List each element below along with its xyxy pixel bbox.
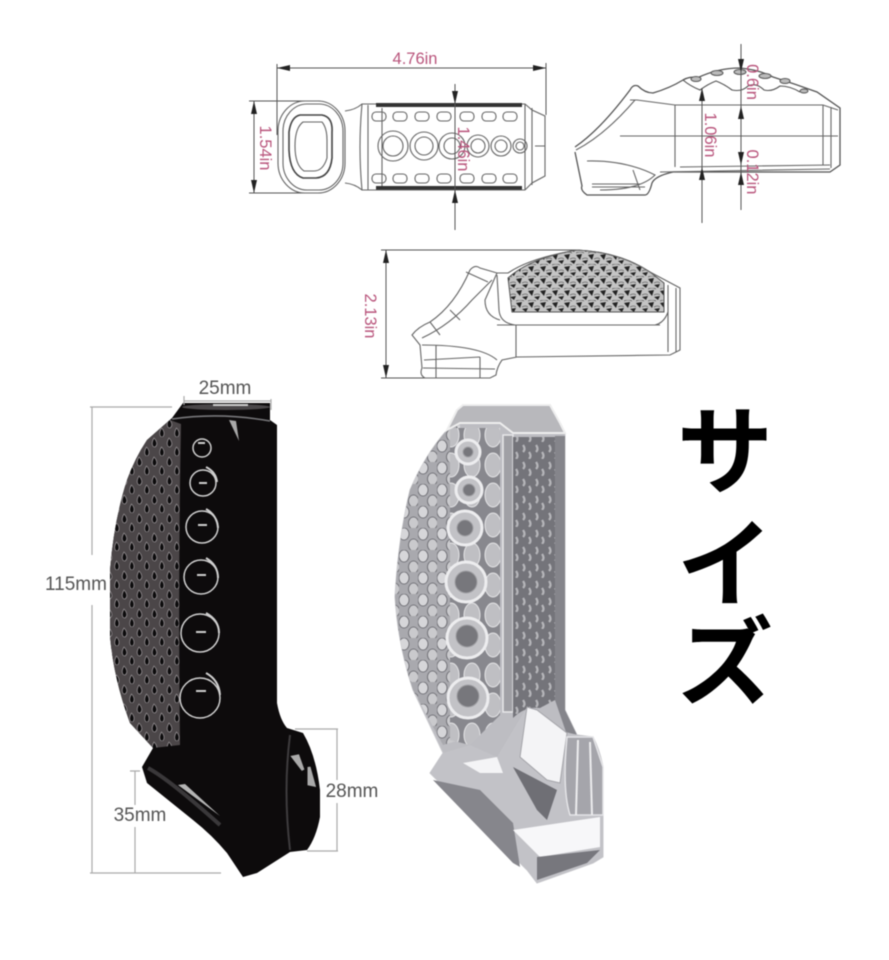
dimension: 115mm: 115mm: [45, 574, 107, 595]
bubble row: [180, 439, 220, 718]
clear rings: [446, 440, 488, 718]
dimension: height 1.54in: 1.54in: [256, 126, 274, 170]
dimension: 1.46in: 1.46in: [454, 127, 472, 171]
dimension: 25mm: [184, 378, 271, 410]
ring end of part: [278, 101, 362, 193]
centre row of circles: [378, 131, 527, 161]
clear top cap: [447, 405, 565, 433]
cylindrical body with dots: [360, 103, 545, 190]
heading: サイズ (size): ズ: [677, 611, 773, 718]
textured nub area: [110, 420, 181, 748]
dimension: height 1.54in: [249, 101, 320, 193]
nub caps on top edge: [691, 70, 808, 93]
dimension: 1.06in: 1.06in: [701, 113, 719, 157]
dimension: 2.13in: 2.13in: [361, 294, 379, 338]
base highlights: [148, 735, 314, 850]
wavy inner line under nubs: [683, 80, 800, 92]
dimension: 2.13in: [361, 250, 580, 378]
dimension: 0.6in: 0.6in: [743, 64, 761, 100]
dimension: 0.12in: 0.12in: [743, 150, 761, 194]
textured clear dome: [395, 425, 460, 745]
black body silhouette: [110, 403, 320, 877]
clear base panels: [430, 707, 603, 883]
side inner lines: [422, 272, 676, 378]
right shadow strip: [555, 436, 577, 735]
dimension: 1.06in: [699, 88, 719, 223]
right speckled panel: [513, 437, 555, 718]
product photo: black sleeve: [45, 378, 378, 877]
section outline: [575, 68, 840, 195]
ring centres: [455, 447, 479, 707]
heading: サイズ (size): [677, 400, 773, 718]
dimension: 115mm: [45, 407, 221, 873]
technical drawing: side view: [361, 250, 680, 378]
dimension: 35mm: [114, 771, 166, 873]
technical drawing: cross-section view: [575, 44, 840, 223]
dimension: overall length 4.76in: [277, 50, 546, 135]
heading: サイズ (size): サ: [677, 400, 773, 507]
upper row of small dots: [372, 112, 517, 121]
dimension: overall length 4.76in: 4.76in: [393, 50, 437, 68]
dimension: 0.6in: [738, 44, 761, 210]
clear body silhouette: [395, 405, 603, 883]
technical drawing: front view: [249, 50, 546, 230]
dimension: 25mm: 25mm: [199, 378, 251, 399]
textured dome: [508, 250, 664, 312]
product photo: clear sleeve: [395, 405, 603, 883]
side outline: [412, 250, 680, 378]
top rim highlights: [172, 404, 270, 441]
section inner lines: [576, 100, 838, 190]
dimension: 35mm: 35mm: [114, 805, 166, 826]
centre column of bumps: [450, 428, 500, 745]
oval column: [503, 435, 513, 712]
lower row of small dots: [372, 174, 517, 183]
dimension: 28mm: [295, 729, 378, 851]
dimension: 28mm: 28mm: [326, 781, 378, 802]
dimension: 1.46in: [452, 84, 472, 230]
heading: サイズ (size): イ: [677, 513, 773, 620]
